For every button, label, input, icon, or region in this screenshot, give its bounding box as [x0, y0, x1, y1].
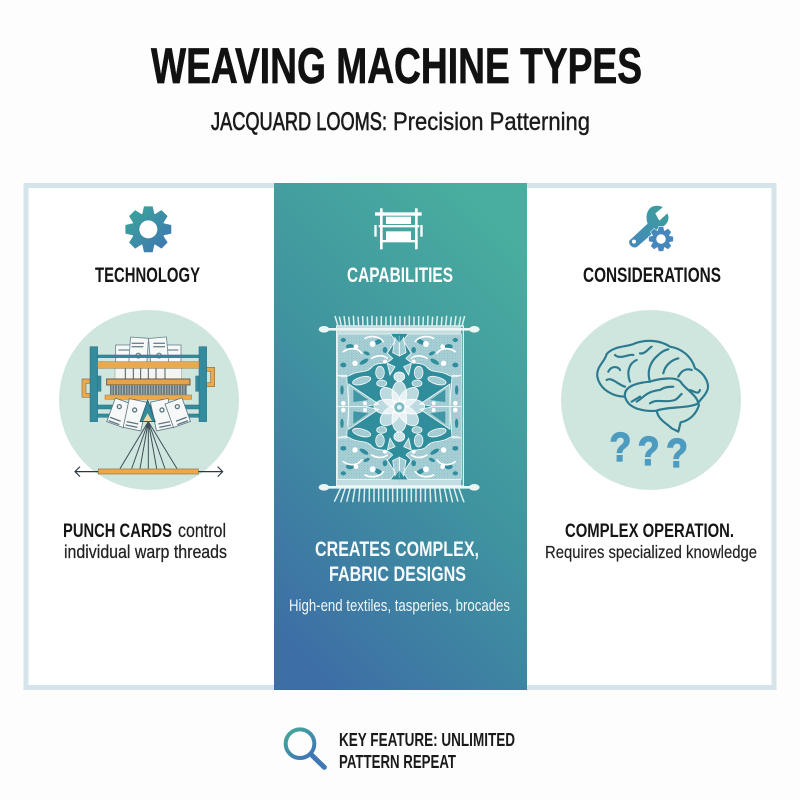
footer: key feature [286, 729, 515, 772]
body text: complex operation: COMPLEX OPERATION. [565, 521, 734, 542]
brain outline [597, 341, 708, 432]
body text: complex operation: Requires specialized knowledge [545, 542, 757, 562]
question marks: ? [638, 428, 660, 474]
lower punch cards [107, 398, 190, 431]
comb [110, 385, 187, 395]
outer frame [26, 186, 774, 688]
key feature text: PATTERN REPEAT [339, 752, 456, 772]
circle backdrop: considerations [561, 310, 741, 490]
body text: complex operation [545, 521, 757, 562]
illustration: jacquard loom with punch cards [75, 337, 223, 477]
middle beam [107, 379, 190, 385]
heading: technology: TECHNOLOGY [95, 264, 200, 287]
rug ground [337, 326, 463, 486]
circle backdrop: technology [59, 310, 239, 490]
panel: technology [59, 206, 239, 562]
lower beam [105, 395, 192, 399]
quadrant lace ornament [337, 327, 405, 407]
body text: applications: High-end textiles, tasperies, brocades [289, 597, 510, 615]
key feature text: KEY FEATURE: UNLIMITED [339, 730, 515, 750]
body heading: creates complex fabric designs: FABRIC DESIGNS [329, 563, 466, 586]
central flower [374, 381, 425, 432]
upper punch cards [116, 337, 181, 378]
heading: capabilities: CAPABILITIES [347, 264, 453, 287]
subtitle: JACQUARD LOOMS: [211, 108, 387, 136]
brain wrinkles [607, 347, 700, 403]
title: WEAVING MACHINE TYPES [151, 38, 642, 94]
icon: magnifying glass [286, 729, 324, 767]
illustration: lace tapestry [319, 316, 480, 502]
body heading: creates complex fabric designs [315, 538, 479, 586]
question marks: ? [609, 424, 631, 470]
body text: punch cards: individual warp threads [64, 541, 227, 562]
icon: wrench and gear [629, 206, 673, 251]
subtitle [211, 108, 590, 136]
top beam [98, 362, 199, 368]
center panel background [274, 183, 527, 690]
icon: loom [374, 208, 423, 249]
body text: punch cards: PUNCH CARDS [63, 521, 172, 542]
warp threads under top beam [115, 368, 182, 379]
question marks [609, 424, 688, 476]
body heading: creates complex fabric designs: CREATES COMPLEX, [315, 538, 479, 561]
icon: gear [125, 206, 171, 252]
central shuttle [140, 400, 155, 422]
frame posts and rails [90, 347, 207, 422]
top fringe [335, 316, 465, 326]
arrow: side to side [75, 467, 223, 477]
harness threads [120, 422, 177, 469]
bottom fringe [334, 486, 464, 502]
body text: punch cards: control [178, 521, 226, 542]
question marks: ? [666, 430, 688, 476]
bottom bar [98, 469, 198, 474]
heading: considerations: CONSIDERATIONS [583, 264, 721, 287]
top rod [319, 326, 480, 333]
body text: punch cards [63, 521, 227, 562]
key feature text [339, 730, 515, 772]
side brackets [82, 367, 215, 397]
subtitle: Precision Patterning [393, 108, 590, 136]
panel: capabilities [274, 183, 527, 690]
illustration: brain with question marks [597, 341, 708, 476]
panel: considerations [545, 206, 757, 562]
bottom rod [319, 484, 480, 491]
